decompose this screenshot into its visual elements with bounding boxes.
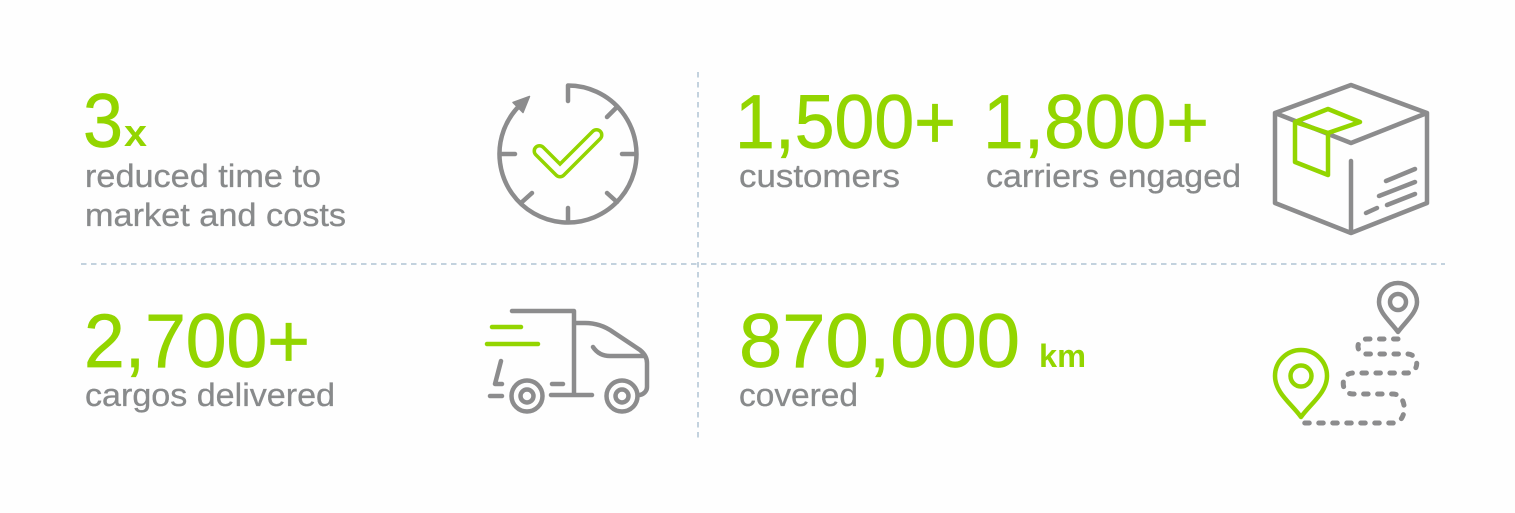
panel: customers and carriers	[735, 80, 1427, 233]
stat: 870,000 km: km	[1039, 338, 1086, 374]
panel: distance covered	[739, 283, 1417, 423]
stat: 3x: x	[124, 113, 147, 155]
label: covered: covered	[739, 377, 858, 413]
stat: 1,800+ carriers engaged	[983, 80, 1241, 194]
stat: 1,500+ customers: 1,500+	[735, 80, 956, 165]
stat: 3x: 3	[83, 79, 123, 164]
icon: package box	[1275, 85, 1427, 233]
stat: 870,000 km: 870,000	[739, 299, 1020, 384]
stat: 1,800+ carriers engaged: 1,800+	[983, 80, 1209, 165]
icon: route with map pins	[1275, 283, 1417, 423]
stat: 1,500+ customers: customers	[739, 158, 900, 194]
label: cargos delivered: cargos delivered	[85, 377, 335, 413]
stat: 2,700+: 2,700+	[84, 299, 310, 384]
panel: reduced time	[83, 79, 636, 233]
label: reduced time to market and costs	[85, 158, 346, 233]
stat: 1,800+ carriers engaged: carriers engaged	[986, 158, 1241, 194]
label: reduced time to market and costs: reduced time to	[85, 158, 321, 194]
label: reduced time to market and costs: market and costs	[85, 197, 346, 233]
panel: cargos delivered	[84, 299, 647, 413]
stat: 3x	[83, 79, 147, 164]
icon: delivery truck	[487, 311, 647, 412]
icon: clock with check mark	[499, 86, 636, 223]
